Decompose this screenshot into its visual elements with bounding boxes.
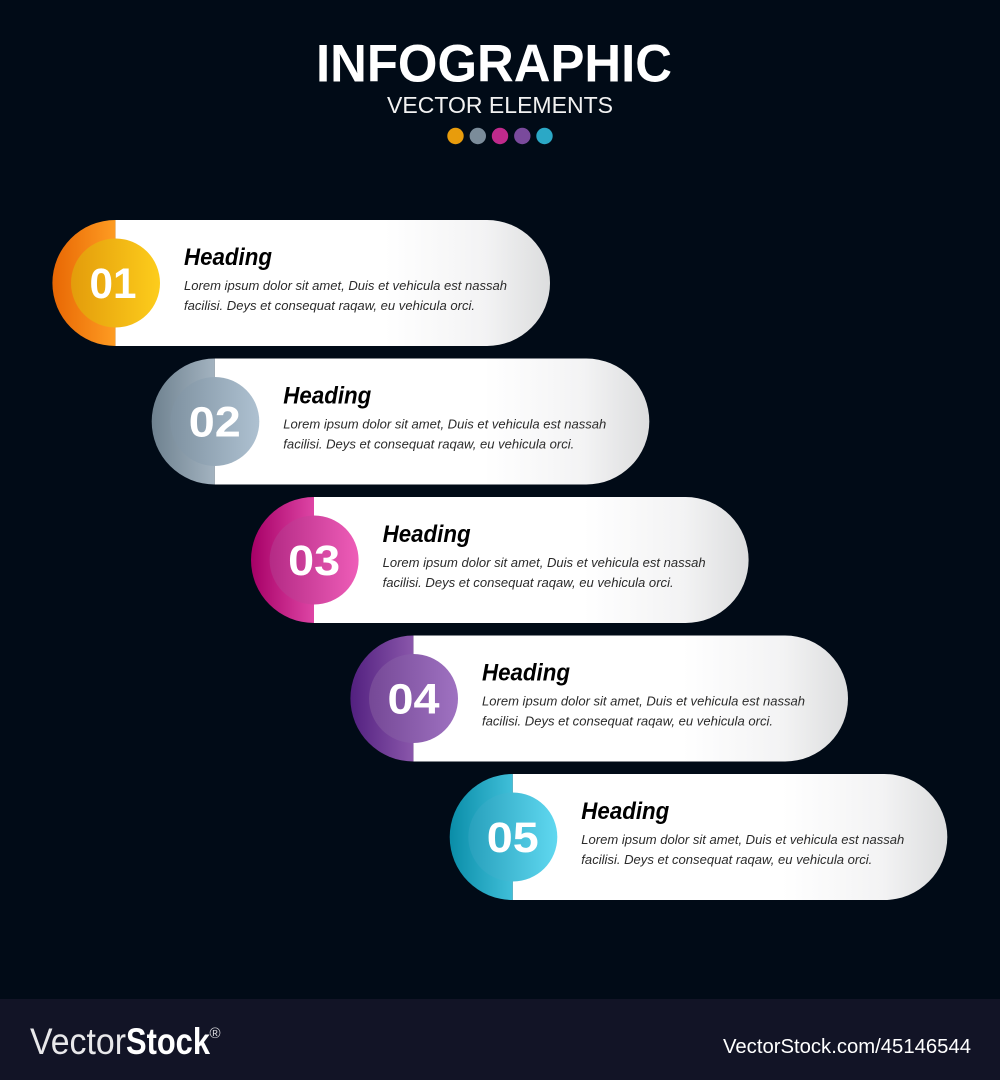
title: INFOGRAPHIC	[316, 34, 672, 94]
panel: step 01	[52, 220, 550, 346]
subtitle: VECTOR ELEMENTS	[387, 92, 613, 118]
panel: step 04: facilisi. Deys et consequat raqaw, eu vehicula orci.	[482, 714, 773, 728]
footer logo: Stock	[126, 1021, 210, 1062]
panel: step 04	[350, 636, 848, 762]
footer logo: Vector	[30, 1021, 126, 1062]
footer logo: ®	[210, 1025, 221, 1042]
footer logo	[30, 1021, 221, 1062]
panel: step 05: 05	[487, 814, 539, 862]
panel: step 01: 01	[90, 260, 136, 308]
panel: step 01: Lorem ipsum dolor sit amet, Duis et vehicula est nassah	[184, 279, 507, 293]
panel: step 03: Heading	[383, 521, 471, 548]
footer bar	[0, 999, 1000, 1080]
panel: step 02: Lorem ipsum dolor sit amet, Duis et vehicula est nassah	[283, 418, 606, 432]
panel: step 02: 02	[189, 398, 241, 446]
panel: step 03: Lorem ipsum dolor sit amet, Duis et vehicula est nassah	[383, 556, 706, 570]
footer image id: VectorStock.com/45146544	[723, 1035, 971, 1058]
panel: step 04: 04	[388, 676, 440, 724]
panel: step 05: Heading	[581, 798, 670, 825]
panel: step 04: Lorem ipsum dolor sit amet, Duis et vehicula est nassah	[482, 694, 805, 708]
panel: step 02	[152, 358, 649, 484]
panel: step 01: Heading	[184, 244, 272, 271]
color dots	[447, 128, 553, 144]
panel: step 03: 03	[288, 537, 340, 585]
panel: step 03: facilisi. Deys et consequat raqaw, eu vehicula orci.	[383, 576, 674, 590]
panel: step 03	[251, 497, 749, 623]
panel: step 02: Heading	[283, 382, 372, 410]
panel: step 05: facilisi. Deys et consequat raqaw, eu vehicula orci.	[581, 853, 872, 867]
panel: step 04: Heading	[482, 660, 570, 686]
panel: step 05: Lorem ipsum dolor sit amet, Duis et vehicula est nassah	[581, 833, 904, 847]
panel: step 01: facilisi. Deys et consequat raqaw, eu vehicula orci.	[184, 299, 475, 313]
panel: step 02: facilisi. Deys et consequat raqaw, eu vehicula orci.	[283, 438, 574, 452]
panel: step 05	[450, 774, 947, 900]
